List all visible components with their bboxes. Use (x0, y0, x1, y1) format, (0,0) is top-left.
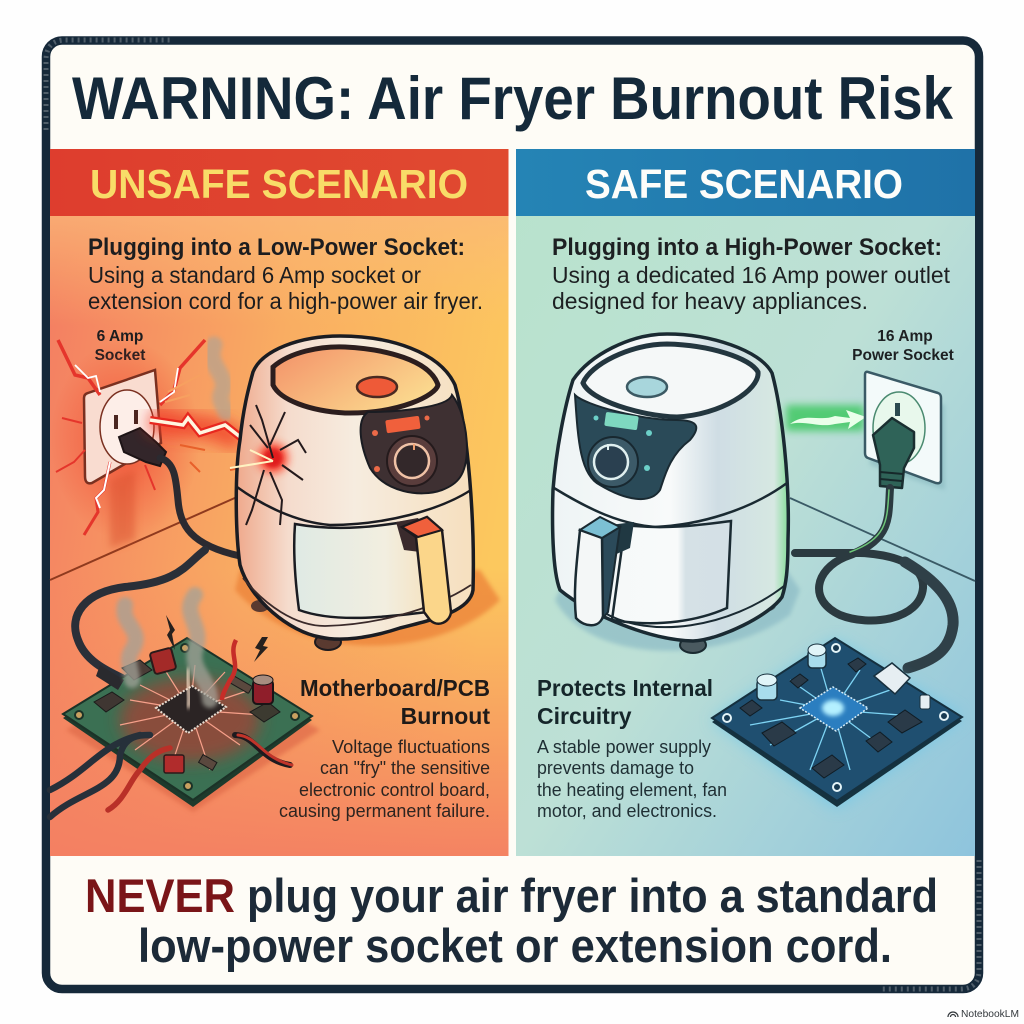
basket drawer (294, 520, 445, 618)
16 amp socket label: 16 Amp (877, 328, 933, 345)
protects internal circuitry text: A stable power supply (537, 737, 711, 757)
light traces (750, 665, 900, 770)
base rim (603, 586, 784, 627)
red heat squiggle (222, 640, 236, 700)
grounded plug (873, 418, 914, 488)
control knob (588, 437, 638, 487)
icon: burn crack (230, 405, 306, 525)
red traces (120, 665, 262, 770)
control panel (361, 395, 467, 493)
electric sparks around socket (56, 340, 205, 535)
protects internal circuitry text (537, 675, 727, 821)
icon: lightning bolt to fryer (150, 418, 272, 472)
protects internal circuitry text: Protects Internal (537, 675, 713, 701)
motherboard burnout text: causing permanent failure. (279, 801, 490, 821)
unsafe description: Using a standard 6 Amp socket or (88, 262, 421, 288)
safe description: Plugging into a High-Power Socket: (552, 234, 942, 261)
chip flame (187, 668, 189, 708)
base rim (243, 578, 471, 626)
icon: green energy arrow (786, 405, 866, 431)
protects internal circuitry text: the heating element, fan (537, 780, 727, 800)
safe description: designed for heavy appliances. (552, 288, 868, 314)
small bolts (166, 615, 268, 662)
safe header band (516, 149, 975, 216)
6 amp socket label: Socket (95, 347, 145, 364)
icon: safe air fryer (553, 334, 800, 653)
unsafe description: Plugging into a Low-Power Socket: (88, 234, 465, 261)
bottom warning: low-power socket or extension cord. (138, 919, 892, 972)
board mount holes (75, 644, 299, 790)
protects internal circuitry text: prevents damage to (537, 758, 694, 778)
central chip (156, 686, 226, 733)
control knob (387, 436, 437, 486)
bottom warning: NEVER (85, 869, 235, 922)
icon: burnt circuit board (50, 595, 320, 817)
lid button (627, 377, 667, 397)
board shadow (66, 655, 320, 812)
components (740, 658, 922, 778)
fryer body (236, 336, 473, 639)
unsafe description (88, 234, 483, 314)
drawer handle (396, 517, 451, 624)
display (385, 416, 421, 433)
fryer lid (273, 347, 438, 413)
wall floor line (50, 497, 237, 580)
panel: safe scenario (516, 149, 975, 856)
icon: healthy circuit board (712, 638, 962, 808)
connector block (874, 663, 910, 694)
fryer body (553, 334, 788, 641)
motherboard burnout text (279, 675, 490, 821)
frayed wires (50, 735, 292, 817)
fryer feet (680, 637, 706, 653)
board burn glow (120, 678, 260, 762)
PCB smoke plumes (124, 595, 210, 700)
board top (712, 638, 962, 801)
lid button (357, 377, 397, 397)
control dots (594, 416, 652, 471)
safe description (552, 234, 951, 314)
unsafe description: extension cord for a high-power air fryer. (88, 288, 483, 314)
board edge (712, 642, 962, 807)
icon: 16 amp socket (865, 372, 945, 490)
motherboard burnout text: Motherboard/PCB (300, 675, 490, 701)
bottom warning (85, 869, 938, 972)
capacitors (757, 644, 930, 709)
protects internal circuitry text: motor, and electronics. (537, 801, 717, 821)
fryer lid (583, 344, 758, 417)
unsafe heading: UNSAFE SCENARIO (90, 161, 468, 207)
motherboard burnout text: Burnout (401, 703, 490, 729)
body seam (554, 483, 787, 527)
6 amp socket label: 6 Amp (97, 328, 143, 345)
16 amp socket label: Power Socket (852, 347, 954, 364)
icon: smoke from socket (212, 345, 226, 412)
board edge (63, 641, 312, 807)
title: WARNING: Air Fryer Burnout Risk (72, 65, 954, 132)
fryer right foot (760, 599, 776, 611)
safe description: Using a dedicated 16 Amp power outlet (552, 262, 951, 288)
safe panel background (516, 149, 975, 856)
body seam (237, 487, 471, 525)
board glow (712, 640, 962, 808)
components (94, 648, 280, 773)
icon: burnt air fryer (230, 336, 500, 650)
fryer shadow (235, 570, 500, 646)
motherboard burnout text: Voltage fluctuations (332, 737, 490, 757)
board mount holes (723, 644, 948, 791)
motherboard burnout text: electronic control board, (299, 780, 490, 800)
drawer handle (575, 517, 634, 625)
central chip (800, 687, 868, 731)
fryer shadow (555, 560, 800, 651)
fryer feet (251, 600, 269, 612)
basket drawer (612, 521, 731, 623)
display (604, 412, 639, 430)
16 amp socket label (852, 328, 954, 364)
NotebookLM watermark: NotebookLM (961, 1009, 1019, 1020)
fryer rear foot (315, 634, 341, 650)
panel: unsafe scenario (50, 149, 508, 856)
safe heading: SAFE SCENARIO (585, 161, 903, 207)
unsafe panel background (50, 149, 508, 856)
motherboard burnout text: can "fry" the sensitive (320, 758, 490, 778)
control panel (575, 395, 696, 499)
bottom warning: plug your air fryer into a standard (247, 869, 938, 922)
cord connector (96, 665, 124, 690)
capacitor (253, 675, 273, 704)
protects internal circuitry text: Circuitry (537, 703, 632, 729)
6 amp socket label (95, 328, 145, 364)
wall floor line (790, 498, 975, 581)
chip glow (822, 700, 844, 716)
icon: damaged power cord (75, 458, 240, 678)
icon: power cord (795, 488, 953, 668)
board top (63, 638, 312, 800)
unsafe header band (50, 149, 508, 216)
icon: sparking 6 amp socket (50, 340, 205, 548)
control dots (372, 416, 430, 472)
